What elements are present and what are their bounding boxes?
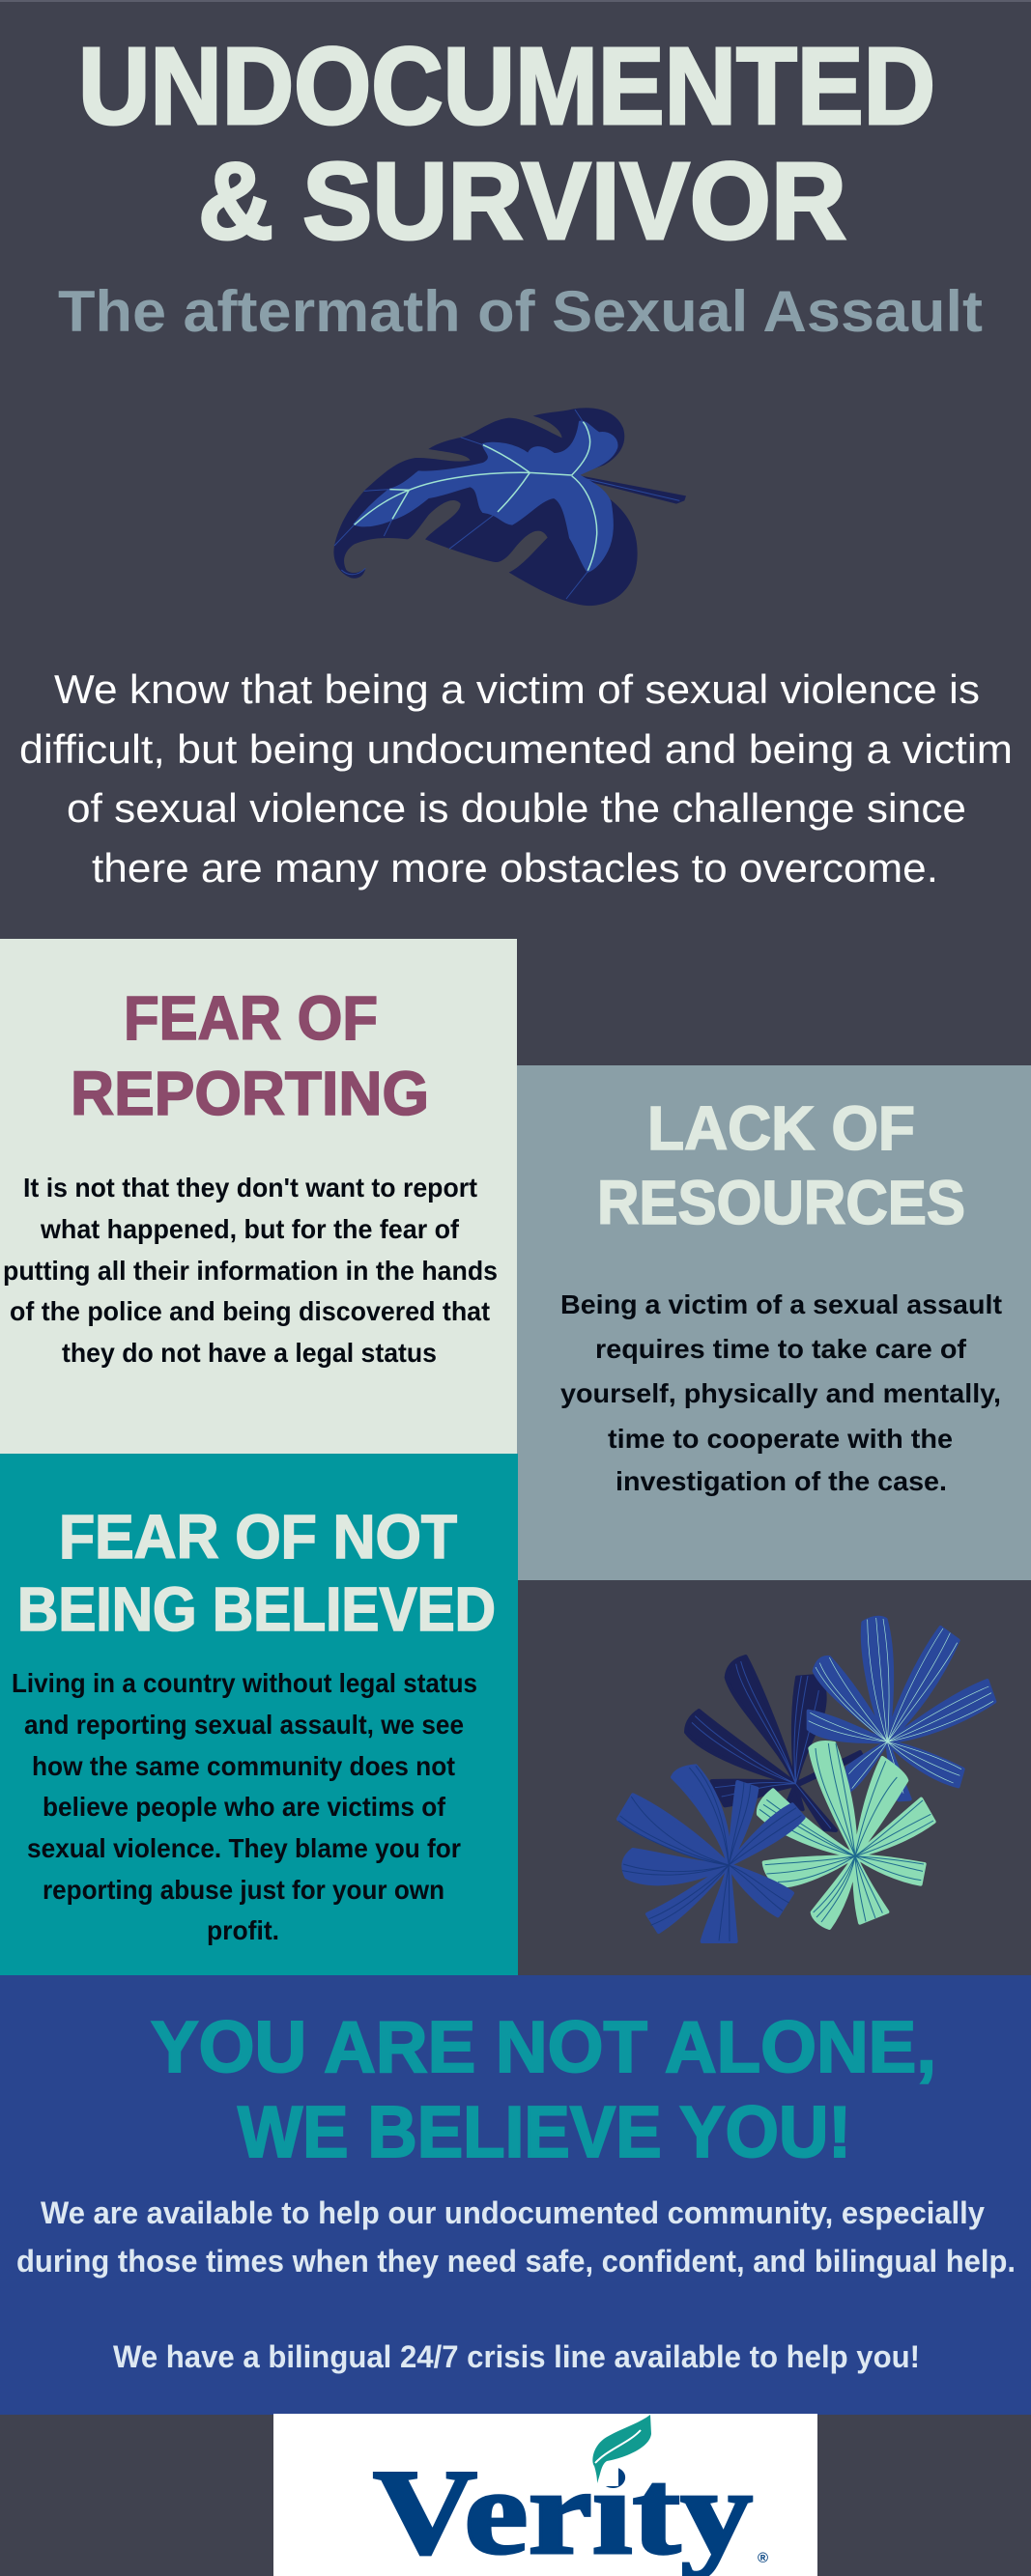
text: fear of reporting body: what happened, but for the fear of — [40, 1214, 460, 1244]
panel: fear of reporting — [0, 939, 517, 1455]
text: fear of not being believed body: reporting abuse just for your own — [43, 1875, 444, 1905]
panel: you are not alone — [0, 1975, 1031, 2415]
heading: fear of reporting: FEAR OF — [124, 983, 378, 1053]
heading: fear of not being believed: BEING BELIEVED — [17, 1574, 496, 1644]
heading: lack of resources — [597, 1093, 965, 1237]
icon: navy flower — [686, 1656, 862, 1830]
text: availability message — [16, 2195, 1016, 2279]
text: lack of resources body: investigation of the case. — [616, 1466, 947, 1496]
icon: flower cluster — [618, 1618, 994, 1941]
text: lack of resources body: time to cooperate with the — [608, 1424, 953, 1454]
heading: you are not alone: YOU ARE NOT ALONE, — [151, 2006, 936, 2087]
text: fear of reporting body — [3, 1173, 498, 1368]
text: lack of resources body: yourself, physically and mentally, — [560, 1378, 1001, 1408]
logo: Verity — [273, 2414, 817, 2576]
panel: fear of not being believed — [0, 1454, 518, 1975]
icon: leaf illustration — [333, 408, 686, 606]
heading: lack of resources: RESOURCES — [597, 1168, 965, 1237]
intro paragraph — [19, 666, 1013, 891]
intro paragraph: difficult, but being undocumented and being a victim — [19, 726, 1013, 772]
logo: Verity: Verity — [373, 2446, 753, 2576]
text: fear of reporting body: putting all their information in the hands — [3, 1256, 498, 1286]
text: availability message: We are available to help our undocumented community, especially — [41, 2195, 985, 2230]
text: fear of reporting body: of the police and being discovered that — [10, 1296, 490, 1326]
text: crisis line message: We have a bilingual 24/7 crisis line available to help you! — [113, 2339, 920, 2374]
heading: fear of reporting — [71, 983, 429, 1128]
intro paragraph: of sexual violence is double the challenge since — [67, 785, 966, 831]
icon: mint flower — [759, 1742, 934, 1928]
text: fear of not being believed body: sexual violence. They blame you for — [27, 1833, 461, 1863]
title: & SURVIVOR — [198, 140, 846, 262]
text: fear of not being believed body: profit. — [207, 1915, 279, 1945]
text: fear of not being believed body: believe people who are victims of — [43, 1792, 446, 1822]
heading: you are not alone — [151, 2006, 936, 2172]
intro paragraph: We know that being a victim of sexual violence is — [54, 666, 980, 712]
icon: royal blue flower — [618, 1766, 804, 1941]
heading: fear of not being believed — [17, 1502, 496, 1644]
heading: you are not alone: WE BELIEVE YOU! — [238, 2091, 851, 2172]
text: availability message: during those times when they need safe, confident, and bilingual help. — [16, 2244, 1016, 2279]
title — [78, 25, 935, 262]
panel: lack of resources — [517, 1065, 1031, 1580]
text: lack of resources body — [560, 1289, 1002, 1496]
intro paragraph: there are many more obstacles to overcome. — [92, 845, 938, 891]
title: UNDOCUMENTED — [78, 25, 935, 147]
text: lack of resources body: Being a victim of a sexual assault — [560, 1289, 1002, 1319]
icon: logo leaf — [592, 2415, 651, 2483]
text: fear of reporting body: they do not have a legal status — [62, 1338, 437, 1368]
heading: fear of not being believed: FEAR OF NOT — [59, 1502, 457, 1571]
icon: blue flower — [809, 1618, 994, 1799]
text: fear of not being believed body — [12, 1668, 477, 1945]
text: fear of not being believed body: and reporting sexual assault, we see — [24, 1710, 464, 1740]
text: fear of not being believed body: Living in a country without legal status — [12, 1668, 477, 1698]
text: lack of resources body: requires time to take care of — [595, 1334, 967, 1364]
heading: fear of reporting: REPORTING — [71, 1059, 429, 1128]
subtitle: The aftermath of Sexual Assault — [58, 279, 983, 344]
heading: lack of resources: LACK OF — [647, 1093, 915, 1163]
text: fear of not being believed body: how the same community does not — [32, 1751, 455, 1781]
text: fear of reporting body: It is not that they don't want to report — [23, 1173, 477, 1203]
logo: Verity: ® — [758, 2550, 768, 2566]
